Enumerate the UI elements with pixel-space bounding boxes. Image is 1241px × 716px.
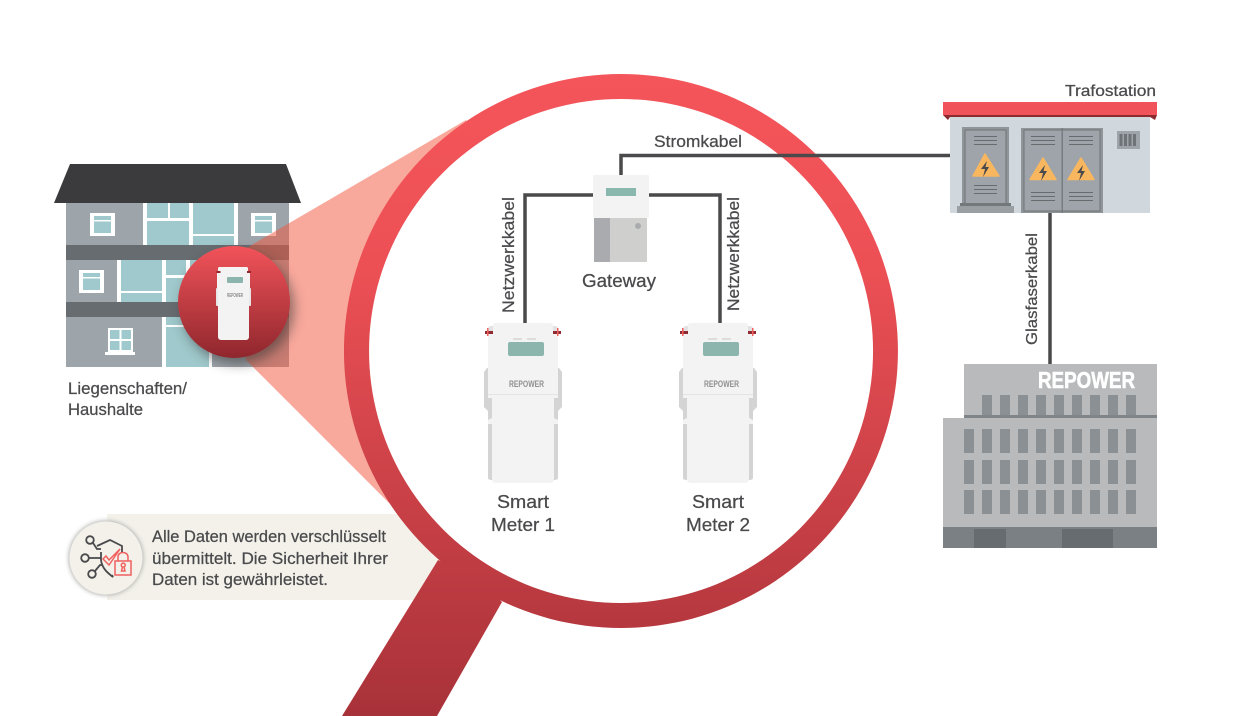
magnifier ring	[344, 74, 898, 628]
smart meter 2: REPOWER	[704, 379, 739, 389]
label: Trafostation: Trafostation	[1065, 83, 1156, 100]
vent	[1117, 131, 1140, 149]
callout text	[152, 527, 388, 589]
callout text: übermittelt. Die Sicherheit Ihrer	[152, 549, 388, 568]
house middle floor windows	[79, 260, 227, 302]
callout panel: data security	[68, 514, 447, 600]
cables	[525, 156, 1050, 364]
smart meter 1	[484, 323, 562, 483]
smart meter 2	[679, 323, 757, 483]
station wall	[950, 117, 1150, 213]
label: Stromkabel: Stromkabel	[654, 132, 742, 151]
headquarters building	[943, 364, 1157, 548]
lower block	[943, 418, 1157, 527]
house top floor windows	[90, 203, 276, 245]
house ground floor windows	[105, 317, 212, 367]
house wall	[66, 203, 289, 367]
label: Smart Meter 2: Smart	[692, 492, 744, 512]
magnifier handle	[342, 560, 502, 716]
red circle	[178, 246, 290, 358]
circle shadow	[182, 252, 294, 364]
label: Netzwerkkabel left: Netzwerkkabel	[499, 197, 518, 313]
icon: shield with lock	[68, 520, 144, 596]
label: Glasfaserkabel: Glasfaserkabel	[1024, 233, 1041, 345]
label: Gateway: Gateway	[582, 271, 656, 291]
double door	[1021, 128, 1103, 213]
callout text: Daten ist gewährleistet.	[152, 570, 328, 589]
callout background	[107, 514, 447, 600]
upper windows	[982, 395, 1136, 415]
callout text: Alle Daten werden verschlüsselt	[152, 527, 386, 546]
label: Smart Meter 2	[686, 492, 750, 535]
label: Smart Meter 1: Meter 1	[491, 515, 555, 535]
magnifier lens	[368, 98, 874, 604]
logo: REPOWER: REPOWER	[1038, 367, 1135, 393]
Stromkabel line	[621, 156, 950, 176]
Netzwerkkabel lines	[525, 195, 720, 323]
ledge	[964, 415, 1157, 418]
ground floor	[943, 527, 1157, 548]
house roof	[54, 164, 301, 203]
small meter circle	[178, 246, 294, 364]
gateway device	[593, 175, 649, 262]
house label: Liegenschaften/	[68, 379, 187, 398]
icon: small smart meter: REPOWER	[227, 293, 243, 299]
icon: warning triangle	[973, 154, 999, 177]
Glasfaserkabel line	[1048, 212, 1052, 364]
label: Smart Meter 1	[491, 492, 555, 535]
icon: warning triangle	[1030, 158, 1056, 181]
station roof	[943, 102, 1157, 120]
upper block	[964, 364, 1157, 418]
house floor bands	[66, 245, 289, 317]
magnifier cone	[246, 120, 621, 512]
transformer station	[943, 102, 1157, 213]
smart meter 1: REPOWER	[509, 379, 544, 389]
icon: warning triangle	[1068, 158, 1094, 181]
label: Smart Meter 1: Smart	[497, 492, 549, 512]
house label: Haushalte	[68, 400, 143, 419]
house label	[68, 379, 187, 419]
label: Smart Meter 2: Meter 2	[686, 515, 750, 535]
left door	[957, 127, 1014, 213]
label: Netzwerkkabel right: Netzwerkkabel	[724, 197, 743, 311]
building: house	[54, 164, 301, 367]
lower windows	[964, 429, 1136, 514]
